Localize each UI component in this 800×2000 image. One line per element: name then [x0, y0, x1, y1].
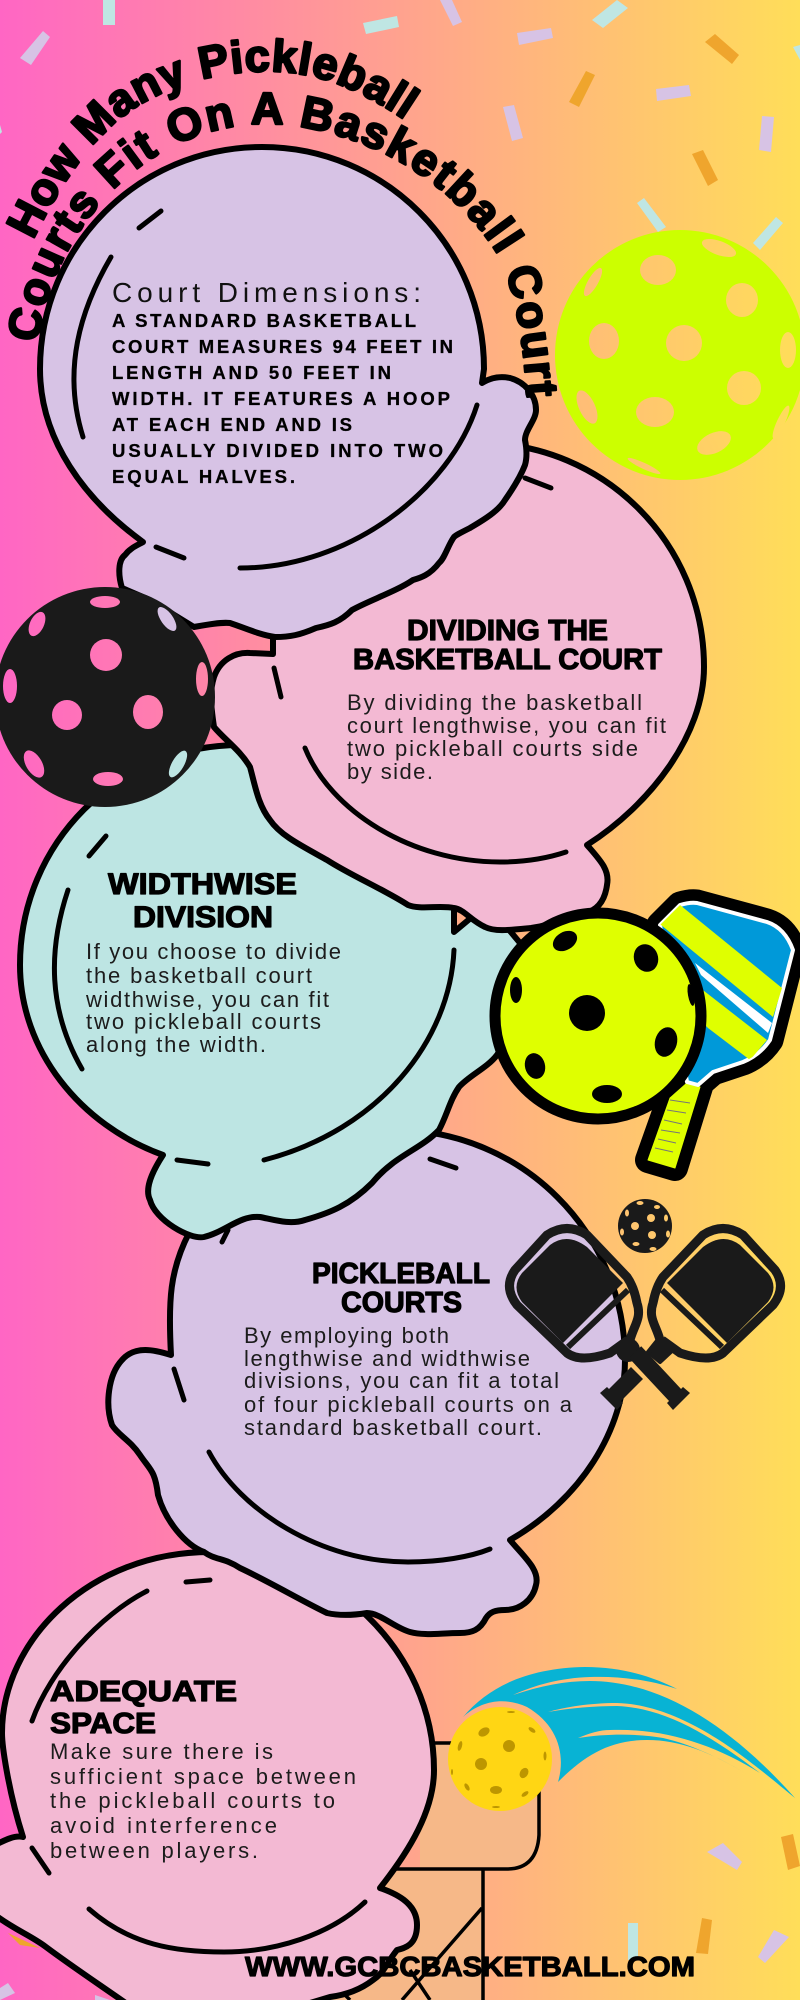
icon: lime pickleball [555, 230, 800, 480]
icon: striped paddle [648, 903, 793, 1168]
left paddle [509, 1228, 640, 1362]
heading: Court Dimensions: [112, 277, 421, 308]
panel: dividing the basketball court [211, 443, 704, 930]
panel: adequate space [0, 1552, 434, 2000]
body text: Make sure there is [50, 1739, 273, 1764]
body text: of four pickleball courts on a [244, 1392, 573, 1417]
body text [347, 690, 666, 784]
body text: the pickleball courts to [50, 1788, 335, 1813]
heading [50, 1676, 237, 1740]
small ball [618, 1199, 672, 1253]
title: Courts Fit On A Basketball Court [8, 92, 558, 398]
heading: WIDTHWISE [108, 868, 297, 901]
body text: WIDTH. IT FEATURES A HOOP [112, 388, 450, 409]
body text: two pickleball courts side [347, 736, 638, 761]
body text: lengthwise and widthwise [244, 1346, 530, 1371]
body text [50, 1739, 356, 1863]
body text: the basketball court [86, 963, 312, 988]
body text: EQUAL HALVES. [112, 466, 295, 487]
body text: AT EACH END AND IS [112, 414, 352, 435]
heading: DIVIDING THE [407, 615, 608, 647]
icon: crossed paddles and ball [509, 1199, 781, 1410]
body text: sufficient space between [50, 1764, 356, 1789]
body text: avoid interference [50, 1813, 277, 1838]
body text: two pickleball courts [86, 1009, 321, 1034]
body text: along the width. [86, 1032, 266, 1057]
heading: ADEQUATE [50, 1676, 237, 1708]
body text: between players. [50, 1838, 258, 1863]
heading: BASKETBALL COURT [353, 644, 662, 676]
icon: flying pickleball with comet trail [448, 1667, 795, 1811]
body text [244, 1323, 573, 1440]
body text: By employing both [244, 1323, 449, 1348]
ice cream cone [300, 1743, 539, 2000]
panel: pickleball courts [108, 1130, 625, 1634]
body text: by side. [347, 759, 433, 784]
heading: PICKLEBALL [312, 1258, 490, 1290]
body text: USUALLY DIVIDED INTO TWO [112, 440, 443, 461]
body text [112, 310, 453, 487]
body text: widthwise, you can fit [85, 987, 329, 1012]
body text: A STANDARD BASKETBALL [112, 310, 416, 331]
body text: By dividing the basketball [347, 690, 642, 715]
title: How Many Pickleball [5, 38, 422, 239]
heading [312, 1258, 490, 1319]
body text: court lengthwise, you can fit [347, 713, 666, 738]
body text: standard basketball court. [244, 1415, 542, 1440]
heading: SPACE [50, 1708, 156, 1740]
body text: COURT MEASURES 94 FEET IN [112, 336, 453, 357]
icon: yellow pickleball [495, 913, 701, 1119]
heading [353, 615, 662, 676]
panel: court dimensions [40, 147, 536, 637]
body text [85, 939, 341, 1057]
footer website: WWW.GCBCBASKETBALL.COM [245, 1951, 695, 1982]
body text: divisions, you can fit a total [244, 1368, 559, 1393]
right paddle [600, 1228, 781, 1410]
heading [108, 868, 297, 934]
body text: LENGTH AND 50 FEET IN [112, 362, 391, 383]
heading: COURTS [341, 1287, 462, 1319]
panel: widthwise division [20, 745, 530, 1237]
body text: If you choose to divide [86, 939, 341, 964]
icon: black pickleball [0, 587, 215, 807]
heading: DIVISION [133, 901, 273, 934]
